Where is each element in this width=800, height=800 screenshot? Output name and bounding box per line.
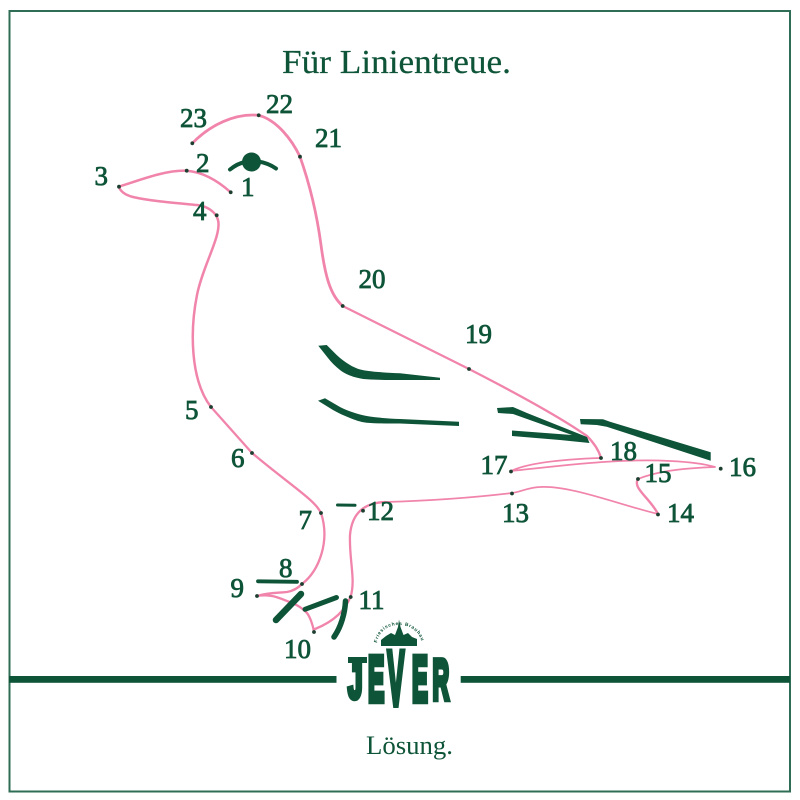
lower tail feather stroke xyxy=(580,419,711,461)
number labels: 18 xyxy=(610,436,637,466)
JEVER wordmark: E xyxy=(368,644,384,716)
number labels: 15 xyxy=(644,458,672,488)
number labels: 8 xyxy=(279,553,292,583)
outline: back and upper tail xyxy=(343,306,601,458)
number labels: 16 xyxy=(729,452,756,482)
number labels: 12 xyxy=(367,496,394,526)
outline: upper tail lines xyxy=(511,458,715,479)
Jever logo xyxy=(346,620,451,721)
number labels: 3 xyxy=(94,161,108,191)
lower wing stroke xyxy=(318,398,459,426)
solution caption: Lösung. xyxy=(366,731,453,760)
connect-the-dots points xyxy=(117,113,723,634)
number labels: 1 xyxy=(241,172,254,202)
number labels xyxy=(94,89,756,664)
divider band left xyxy=(9,676,336,683)
number labels: 23 xyxy=(180,103,207,133)
JEVER wordmark xyxy=(348,636,449,721)
JEVER wordmark: R xyxy=(432,650,449,713)
outline: left foot and leg xyxy=(211,407,324,632)
JEVER wordmark: J xyxy=(348,654,362,709)
number labels: 11 xyxy=(358,585,384,615)
number labels: 19 xyxy=(465,319,492,349)
outline: head and neck back xyxy=(192,115,343,306)
number labels: 2 xyxy=(196,148,210,178)
number labels: 14 xyxy=(667,498,694,528)
icon: bird eye with brow strokes xyxy=(230,152,276,172)
number labels: 5 xyxy=(185,395,198,425)
JEVER wordmark: V xyxy=(388,636,404,721)
upper wing stroke xyxy=(318,345,440,380)
number labels: 17 xyxy=(480,450,508,480)
number labels: 6 xyxy=(231,443,244,473)
number labels: 10 xyxy=(284,634,311,664)
number labels: 21 xyxy=(315,123,342,153)
brewery arc text: Friesisches Brauhaus xyxy=(374,622,424,643)
bird outline xyxy=(117,113,723,634)
divider band right xyxy=(461,676,790,683)
number labels: 20 xyxy=(358,264,386,294)
outline: lower tail notch xyxy=(637,479,658,514)
leg and foot strokes xyxy=(258,505,355,637)
number labels: 9 xyxy=(230,573,244,603)
outline: right leg and foot xyxy=(315,502,385,629)
number labels: 7 xyxy=(298,505,312,535)
JEVER wordmark: E xyxy=(412,644,428,716)
number labels: 13 xyxy=(502,498,529,528)
number labels: 22 xyxy=(266,89,293,119)
title: Für Linientreue. xyxy=(282,44,511,81)
outline: belly and tail underside xyxy=(385,487,658,514)
icon: brewery castle xyxy=(381,620,417,646)
number labels: 4 xyxy=(193,196,207,226)
upper tail feather strokes xyxy=(497,407,590,443)
outline: chest and beak xyxy=(119,171,231,407)
